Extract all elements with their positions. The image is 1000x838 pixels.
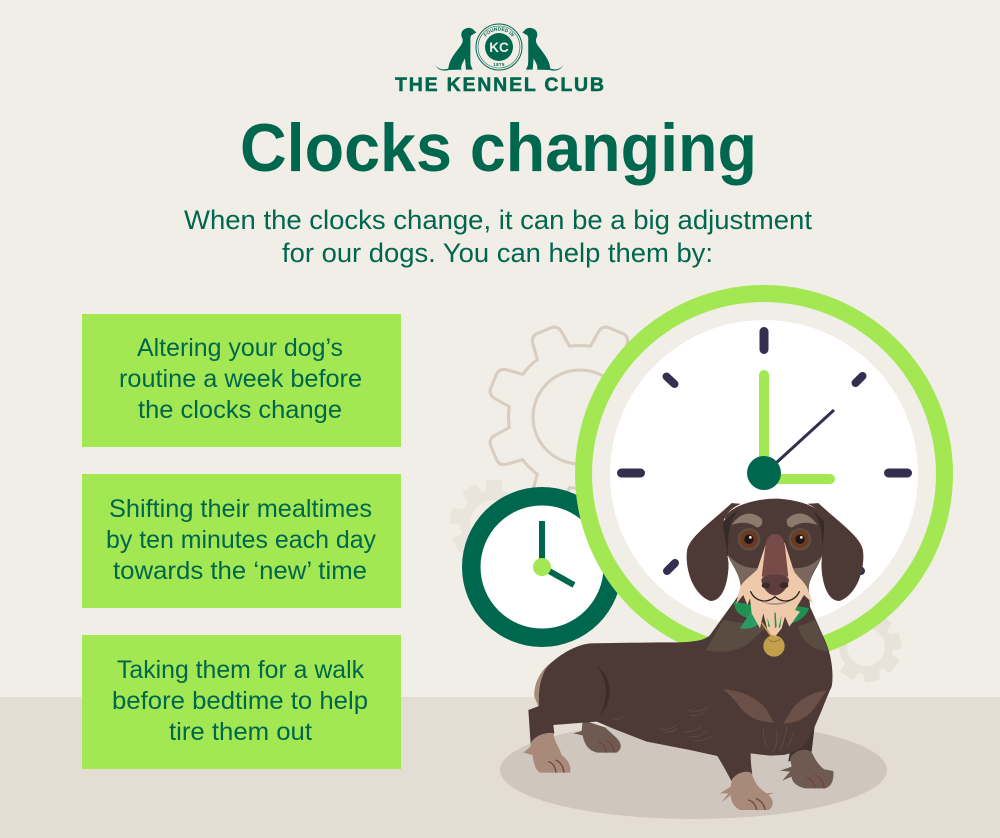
logo dog left bbox=[435, 28, 476, 71]
icon: large outlined gear bbox=[488, 325, 672, 509]
medal bbox=[762, 623, 774, 640]
neck shading bbox=[706, 620, 828, 652]
fur strokes bbox=[612, 707, 793, 752]
muzzle and beard bbox=[736, 538, 813, 637]
mouth bbox=[751, 592, 799, 601]
icon: small clock bbox=[462, 487, 622, 647]
chest patches bbox=[723, 689, 774, 723]
logo dog right bbox=[522, 28, 564, 71]
far rear leg bbox=[573, 720, 621, 753]
panel: tip 2: Shifting their mealtimes bbox=[109, 495, 372, 523]
panel: tip 2 bbox=[82, 474, 401, 608]
cheek shading bbox=[728, 555, 822, 595]
beard gaps bbox=[767, 613, 782, 628]
chin bbox=[760, 600, 792, 605]
dog shadow bbox=[500, 721, 887, 819]
near front paw bbox=[720, 772, 774, 810]
panel: tip 1: routine a week before bbox=[119, 365, 362, 393]
panel: tip 2: towards the ‘new’ time bbox=[113, 557, 367, 585]
intro text: When the clocks change, it can be a big adjustment bbox=[184, 205, 812, 235]
intro text: for our dogs. You can help them by: bbox=[282, 238, 713, 268]
panel: tip 3: Taking them for a walk bbox=[117, 656, 364, 684]
clock hands bbox=[747, 375, 834, 490]
panel: tip 3: tire them out bbox=[169, 718, 312, 746]
panel: tip 2: by ten minutes each day bbox=[106, 526, 376, 554]
left ear bbox=[687, 503, 740, 601]
dog head bbox=[687, 499, 863, 657]
panel: tip 1: Altering your dog’s bbox=[137, 334, 343, 362]
panel: tip 3 bbox=[82, 635, 401, 769]
illustration: dachshund bbox=[523, 499, 863, 810]
dog body bbox=[523, 593, 833, 810]
near rear paw bbox=[523, 733, 570, 773]
clock tick marks bbox=[622, 332, 908, 571]
snout stripe bbox=[762, 534, 788, 577]
nose bbox=[761, 574, 789, 595]
icon: large clock bbox=[575, 285, 953, 663]
icon: small beige gear bbox=[449, 480, 528, 558]
title: Clocks changing bbox=[240, 110, 757, 186]
collar bbox=[734, 602, 810, 623]
skull bbox=[725, 499, 825, 608]
hip crease bbox=[596, 666, 610, 716]
logo roundel: FOUNDED IN bbox=[484, 27, 514, 37]
intro text bbox=[184, 205, 812, 268]
logo: The Kennel Club bbox=[394, 24, 604, 96]
logo roundel bbox=[476, 24, 522, 70]
logo roundel: 1875 bbox=[493, 62, 505, 67]
icon: lower right gear bbox=[839, 614, 902, 683]
logo wordmark: THE KENNEL CLUB bbox=[395, 74, 604, 96]
right ear bbox=[808, 503, 863, 601]
dark edges beside ears bbox=[723, 507, 825, 556]
toes bbox=[548, 740, 824, 810]
panel: tip 3: before bedtime to help bbox=[112, 687, 368, 715]
far front paw bbox=[780, 750, 833, 788]
eyebrow patches bbox=[732, 513, 762, 527]
panel: tip 1: the clocks change bbox=[138, 396, 342, 424]
panel: tip 1 bbox=[82, 314, 401, 447]
floor band bbox=[0, 697, 1000, 838]
eyes bbox=[738, 528, 760, 551]
logo roundel: KC bbox=[489, 40, 509, 55]
